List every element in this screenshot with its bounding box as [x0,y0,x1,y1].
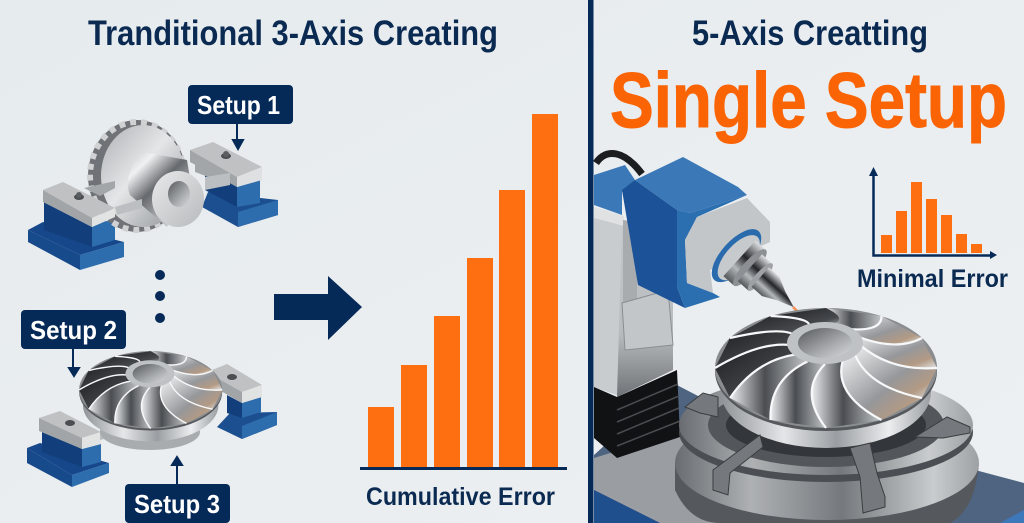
chuck jaws [685,393,970,438]
column bracket [622,290,673,350]
callout: setup 2 [21,310,126,376]
callout: setup 3: Setup 3 [134,489,220,519]
cable [596,153,642,174]
spark [793,307,815,328]
impeller [715,308,937,448]
callout: setup 1 [188,85,293,149]
spindle and tool [703,221,816,332]
callout: setup 2: Setup 2 [30,315,117,345]
setup 1 assembly: gear on fixtures [28,120,278,270]
front chuck jaws [713,435,885,513]
callout: setup 3 [125,457,230,523]
spindle head [594,157,770,308]
chart label: Cumulative Error [366,483,555,511]
chart label: Minimal Error [857,265,1008,293]
bellows [594,370,680,458]
arrow: to cumulative error [274,276,362,340]
chuck [675,375,979,523]
bar chart: minimal error [857,167,1008,293]
setup 2 assembly: impeller on fixtures [27,351,277,487]
ellipsis dots [155,270,165,323]
divider [588,0,594,523]
machine column [594,207,673,397]
bar chart: cumulative error [360,114,567,511]
machine table [594,383,1024,523]
title: 5-axis: 5-Axis Creatting [692,14,928,53]
callout: setup 1: Setup 1 [197,90,280,120]
panel: 5-axis machine scene [594,153,1024,523]
title: traditional 3-axis: Tranditional 3-Axis Creating [88,14,498,53]
